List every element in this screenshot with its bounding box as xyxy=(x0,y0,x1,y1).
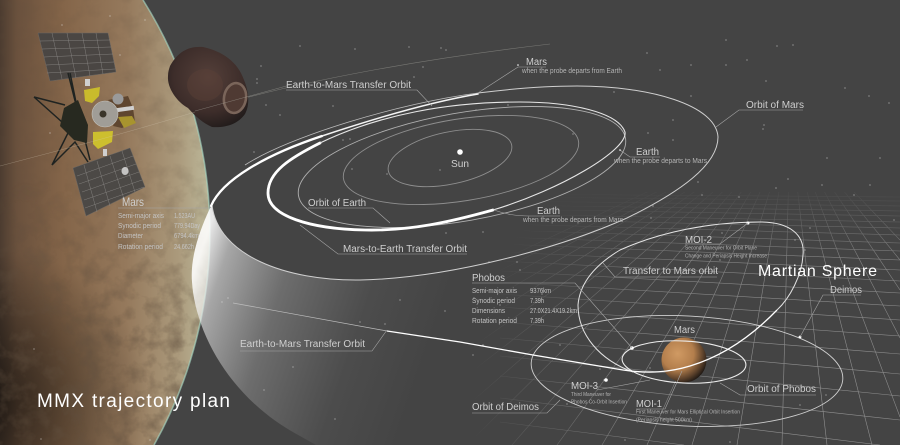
perspective grid xyxy=(494,196,900,445)
label: Orbit of Mars xyxy=(716,100,804,127)
Sun xyxy=(451,149,469,170)
label: Earth when the probe departs from Mars: Earth xyxy=(537,206,560,217)
transfer thin continuation xyxy=(320,102,625,210)
Mars info table: Semi-major axis xyxy=(118,213,164,220)
label: MOI-1 xyxy=(636,371,740,424)
Phobos info table: Rotation period xyxy=(472,318,517,325)
Mars info table: 24.662h xyxy=(174,244,194,251)
grid top fade xyxy=(450,190,900,260)
Phobos moon xyxy=(168,47,290,127)
earth to Mars transfer thick xyxy=(211,136,322,206)
label: Mars-to-Earth Transfer Orbit xyxy=(300,225,467,255)
label: MOI-3 xyxy=(571,380,650,406)
label: MOI-2: MOI-2 xyxy=(685,235,712,246)
label: Earth-to-Mars Transfer Orbit lower: Earth-to-Mars Transfer Orbit xyxy=(240,339,365,350)
label: Earth when the probe departs to Mars xyxy=(613,147,707,165)
orbit of Phobos xyxy=(621,338,747,386)
planet Mars surface xyxy=(0,0,212,445)
label: Orbit of Deimos xyxy=(472,400,560,413)
label: MOI-1: MOI-1 xyxy=(636,399,662,410)
label: MOI-1: First Maneuver for Mars Elliptical Orbit Insertion xyxy=(636,410,740,416)
label: Transfer to Mars orbit: Transfer to Mars orbit xyxy=(623,266,718,277)
orbit of Deimos xyxy=(528,308,846,434)
gold foil upper xyxy=(84,87,100,103)
label: Orbit of Earth: Orbit of Earth xyxy=(308,198,366,209)
label: Earth when the probe departs from Mars: when the probe departs from Mars xyxy=(522,217,623,224)
Martian sphere orbits xyxy=(233,222,846,434)
title: MMX trajectory plan xyxy=(37,391,230,412)
Mars info table: 6794.4km xyxy=(174,233,199,240)
label: MOI-2 xyxy=(685,223,767,260)
gold tip xyxy=(118,116,136,128)
label: Orbit of Phobos xyxy=(720,383,816,395)
Mars info table: 779.94Day xyxy=(174,223,200,230)
Mars info table: Synodic period xyxy=(118,223,161,230)
label: MOI-3: Third Maneuver for xyxy=(571,392,611,398)
solar panel lower xyxy=(73,148,145,216)
Phobos info table: 27.0X21.4X19.2km xyxy=(530,308,577,315)
white plane sweep xyxy=(192,205,520,445)
label: Orbit of Earth xyxy=(308,198,390,223)
Mars info table: Rotation period xyxy=(118,244,163,251)
Mars info table xyxy=(118,195,210,251)
Mars info table: 1.523AU xyxy=(174,213,195,220)
label: Earth when the probe departs from Mars xyxy=(494,206,623,224)
label: Mars when the probe departs from Earth xyxy=(478,57,622,93)
label: Orbit of Phobos: Orbit of Phobos xyxy=(747,384,816,395)
thin line through spacecraft xyxy=(0,112,195,166)
label: Deimos xyxy=(800,285,862,337)
label: Earth when the probe departs to Mars: when the probe departs to Mars xyxy=(613,158,707,165)
mars to Earth transfer bottom xyxy=(268,143,493,230)
label: Earth when the probe departs to Mars: Earth xyxy=(636,147,659,158)
label: MOI-2: Second Maneuver for Orbit Plane xyxy=(685,246,757,252)
orbit of Mars lower and right xyxy=(212,86,718,280)
body xyxy=(60,100,88,143)
label: Deimos: Deimos xyxy=(830,285,862,296)
label: Mars-to-Earth Transfer Orbit: Mars-to-Earth Transfer Orbit xyxy=(343,244,467,255)
arrival trajectory far xyxy=(233,303,387,331)
orbit inner first xyxy=(383,119,517,197)
Phobos info table: 9376km xyxy=(530,288,551,295)
maneuver points xyxy=(630,346,634,350)
Phobos info table: 7.39h xyxy=(530,298,544,305)
label: MOI-2: Change and Periapsis Height Increase xyxy=(685,254,767,260)
dish antenna xyxy=(92,101,118,127)
Sun: Sun xyxy=(451,159,469,170)
orbit of Earth xyxy=(289,85,635,249)
small Mars globe xyxy=(662,338,706,382)
spacecraft MMX xyxy=(34,33,145,216)
gold foil lower xyxy=(93,131,113,149)
orbit inner second xyxy=(337,101,585,219)
label: MOI-3: Phobos Co-Orbit Insertion xyxy=(571,400,627,406)
label: Mars when the probe departs from Earth: Mars xyxy=(526,57,547,68)
earth to Mars transfer taper xyxy=(322,94,478,136)
Phobos info table: Semi-major axis xyxy=(472,288,517,295)
label: Transfer to Mars orbit xyxy=(603,263,718,277)
arrival trajectory near xyxy=(387,310,777,372)
orbit of Mars upper xyxy=(245,93,478,165)
label: MOI-3: MOI-3 xyxy=(571,381,598,392)
Phobos info table: Synodic period xyxy=(472,298,515,305)
Mars info table: Diameter xyxy=(118,233,144,240)
label: MOI-1: (Periapsis height 500km) xyxy=(636,418,692,424)
label: Earth-to-Mars Transfer Orbit upper: Earth-to-Mars Transfer Orbit xyxy=(286,80,411,91)
faint long orbit arc xyxy=(195,44,550,112)
label: Earth-to-Mars Transfer Orbit lower xyxy=(240,330,387,351)
Phobos info table xyxy=(472,273,632,348)
lander legs xyxy=(34,73,90,165)
rear modules xyxy=(108,96,135,128)
solar panel upper xyxy=(38,33,116,81)
transfer to Mars orbit loop xyxy=(578,222,803,372)
label: Orbit of Mars: Orbit of Mars xyxy=(746,100,804,111)
Phobos info table: Dimensions xyxy=(472,308,505,315)
Phobos info table: 7.39h xyxy=(530,318,544,325)
Mars info table: Mars xyxy=(122,195,144,209)
Solar system orbits xyxy=(211,85,718,280)
label: Mars near globe: Mars xyxy=(674,325,695,336)
label: Orbit of Deimos: Orbit of Deimos xyxy=(472,402,539,413)
label: Mars when the probe departs from Earth: when the probe departs from Earth xyxy=(521,68,622,75)
label: Earth-to-Mars Transfer Orbit upper xyxy=(286,80,432,106)
heading: Martian Sphere: Martian Sphere xyxy=(758,263,877,280)
booms xyxy=(85,79,90,86)
Phobos info table: Phobos xyxy=(472,273,505,284)
